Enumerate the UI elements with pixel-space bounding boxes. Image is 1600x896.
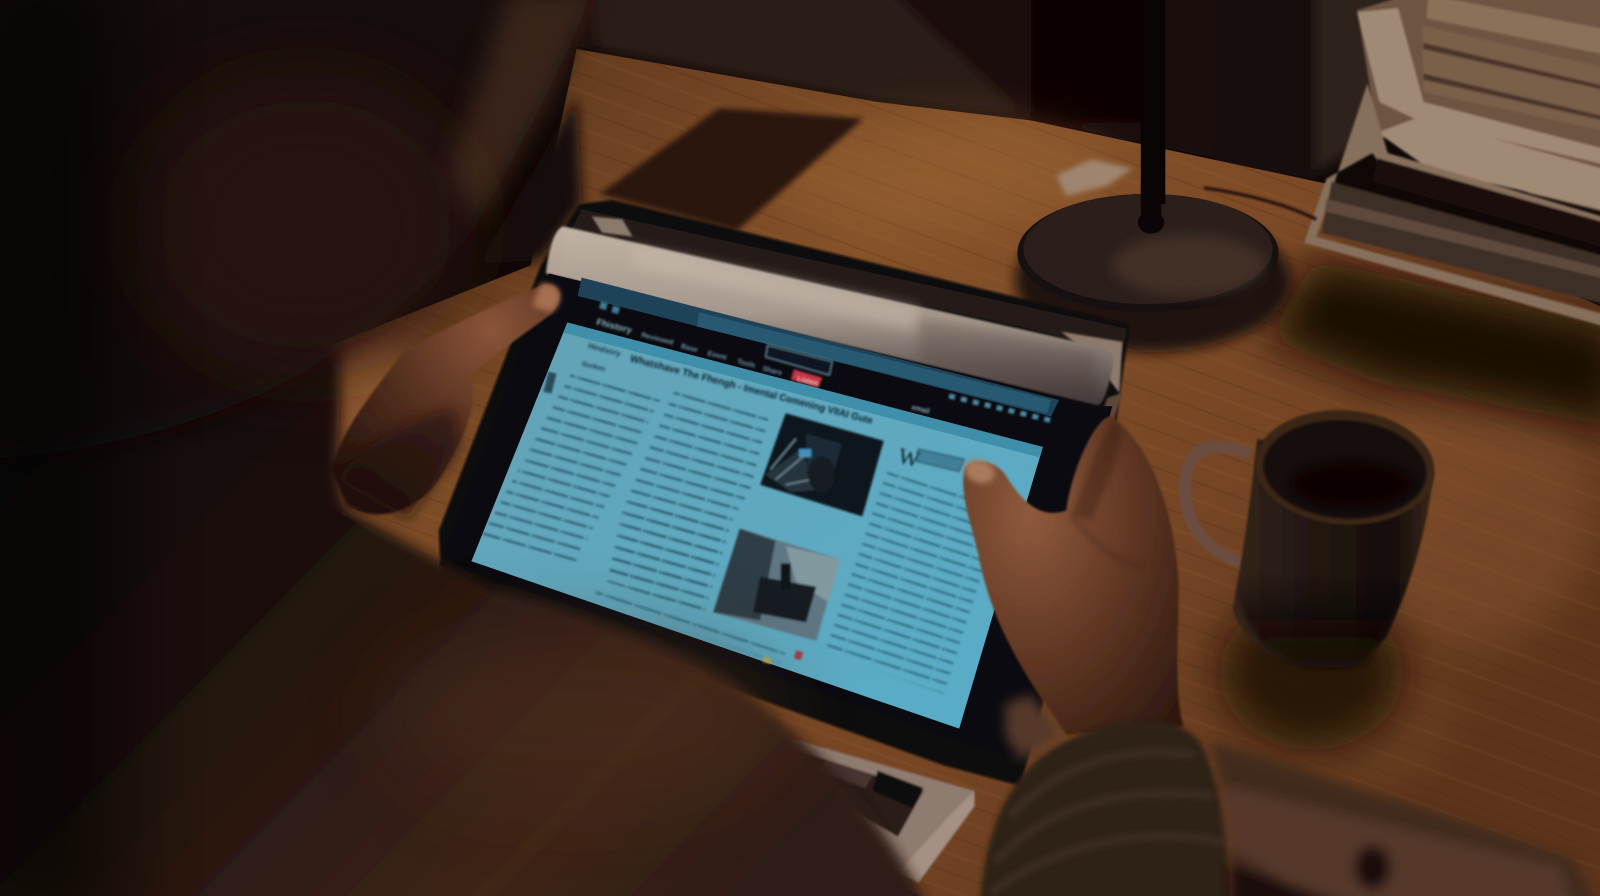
dark placemat on desk <box>600 108 863 231</box>
browser top bar <box>578 278 1059 416</box>
tablet back shell <box>439 200 1130 786</box>
knit sleeve <box>980 721 1230 896</box>
breadcrumb: Hindsory <box>587 341 622 358</box>
papers and pencil on desk at bottom right <box>1209 740 1600 896</box>
right text column <box>824 469 1005 694</box>
nav link: share: Share <box>762 365 783 377</box>
toolbar icons <box>949 396 1051 420</box>
browser nav bar <box>595 301 1051 420</box>
coffee mug <box>1185 404 1438 750</box>
search box <box>765 345 833 376</box>
small side icon <box>544 372 556 394</box>
person's sweater body <box>0 337 944 896</box>
right hand holding tablet <box>961 416 1184 735</box>
lower middle text column <box>607 500 730 612</box>
left hand holding tablet <box>332 284 560 520</box>
article photo bottom <box>713 529 840 641</box>
Wikipedia W logo: W <box>896 443 923 472</box>
page footer marker yellow <box>763 657 772 664</box>
nav link: tools: Tools <box>736 357 756 370</box>
wooden desk <box>306 49 1600 896</box>
site logo text: Fhistory <box>595 317 634 335</box>
middle text column <box>607 384 770 592</box>
section label: Sunken <box>581 360 606 373</box>
page text columns <box>480 341 1005 694</box>
dark object left of tablet <box>480 97 582 263</box>
article heading: Whatshave The Fhengh - Imental Comening VIIAI Gute <box>629 354 874 427</box>
left text column <box>480 369 663 569</box>
red button: Listen <box>796 375 819 388</box>
light blue page <box>471 322 1043 729</box>
shadow under stack of books <box>1265 260 1600 429</box>
nav link: event: Event <box>707 349 728 362</box>
dark vignette on left edge <box>0 0 122 896</box>
nav link: about: Base <box>680 342 699 354</box>
label: email: email <box>911 403 930 416</box>
red button <box>791 369 822 388</box>
bottom caption text <box>592 590 786 663</box>
page footer marker red <box>794 650 803 660</box>
small laptop keyboard beneath tablet <box>760 730 974 883</box>
article photo top <box>760 413 884 516</box>
white roller bar <box>546 227 1113 405</box>
nav link: features: Reviewed <box>640 331 674 347</box>
paper on desk behind lamp <box>1056 159 1133 196</box>
right box heading <box>916 449 964 471</box>
curtain behind desk <box>571 0 1429 179</box>
tablet black screen frame <box>439 273 1112 760</box>
person's head <box>0 0 602 459</box>
stack of books <box>1304 0 1600 329</box>
desk lamp <box>1015 0 1316 352</box>
tablet <box>439 200 1130 786</box>
